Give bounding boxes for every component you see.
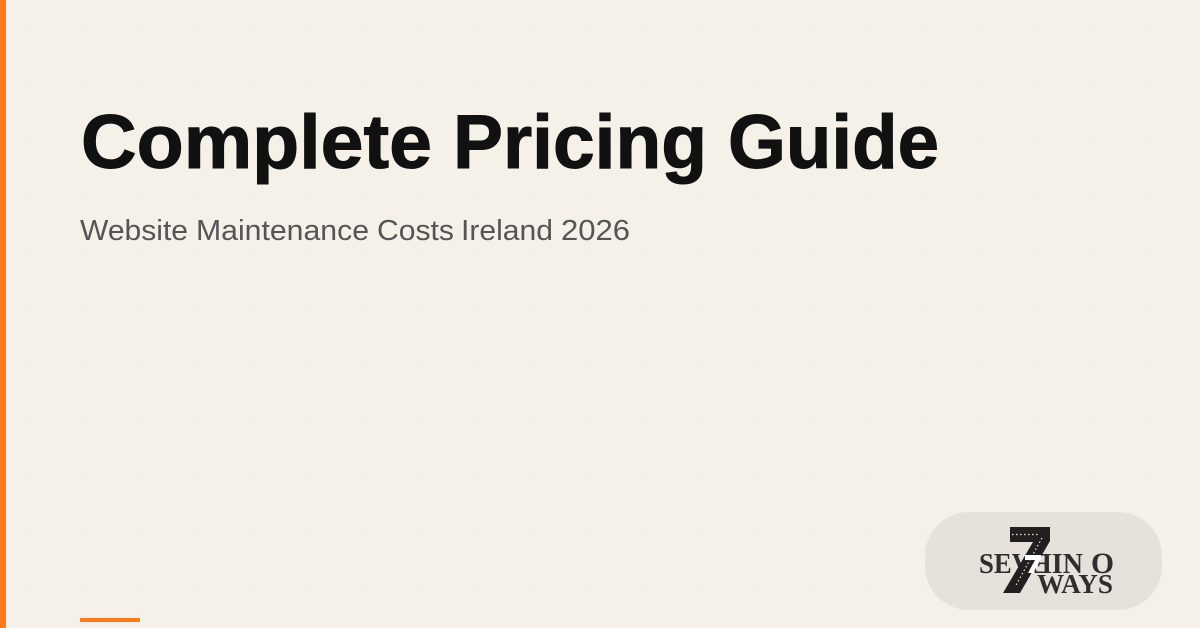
logo wordmark: seven ways: ƎIN xyxy=(1033,548,1083,580)
logo numeral 7 xyxy=(1003,527,1050,593)
title xyxy=(81,100,939,185)
bottom orange accent line xyxy=(80,618,140,622)
subtitle: Costs xyxy=(377,215,454,247)
title: Guide xyxy=(728,100,939,185)
subtitle: Ireland xyxy=(461,215,553,247)
logo wordmark: seven ways: O xyxy=(1091,547,1114,580)
subtitle: Maintenance xyxy=(196,215,369,247)
logo wordmark: seven ways: SEV xyxy=(979,548,1031,580)
logo wordmark: seven ways xyxy=(979,547,1114,599)
logo wordmark: seven ways: WAYS xyxy=(1037,569,1113,599)
title: Complete xyxy=(81,100,432,185)
title: Pricing xyxy=(453,100,707,185)
left accent bar xyxy=(0,0,6,628)
logo badge xyxy=(925,512,1162,610)
subtitle: 2026 xyxy=(561,215,630,247)
subtitle xyxy=(80,215,630,247)
subtitle: Website xyxy=(80,215,188,247)
